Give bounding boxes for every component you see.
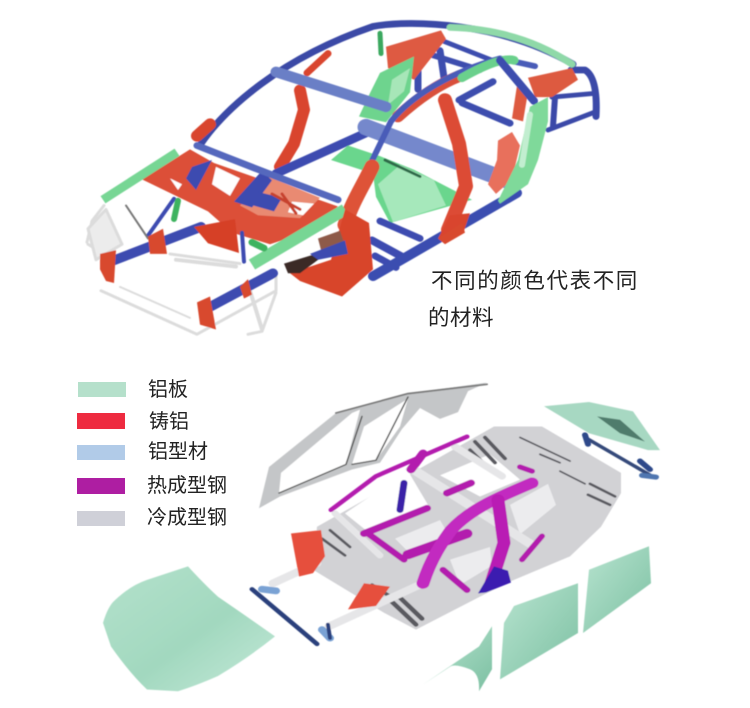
- rear frame in blue: [548, 70, 596, 130]
- front rails in blue: [108, 199, 273, 310]
- body shell in grey: [313, 426, 621, 630]
- legend item: hot-formed steel: 热成型钢: [147, 474, 227, 497]
- legend item: cold-formed steel: [77, 506, 227, 529]
- rear red parts: [488, 68, 578, 194]
- near arc in purple: [423, 483, 532, 583]
- rear cross beam in light blue: [366, 127, 507, 180]
- near B pillar in red: [445, 100, 466, 230]
- front door in green: [500, 583, 578, 679]
- lower body in red: [194, 219, 239, 253]
- firewall in red: [142, 149, 338, 244]
- crash box joints in red: [100, 223, 465, 329]
- firewall openings and blue insets: [170, 160, 320, 218]
- far B pillar lower in dark blue: [400, 483, 404, 510]
- legend item: aluminium sheet: [78, 378, 188, 401]
- wheel house dark: [284, 254, 326, 273]
- floor panels in green: [331, 146, 472, 223]
- near B pillar base in dark blue: [478, 566, 511, 593]
- front struts in green: [103, 152, 345, 265]
- near rocker in blue: [373, 193, 517, 276]
- caption: different colours represent different materials: 的材料: [428, 306, 494, 330]
- legend item: hot-formed steel: [77, 474, 227, 497]
- far roof rail in blue: [201, 23, 573, 144]
- exploded car diagram: [103, 383, 660, 691]
- car frame: coloured material diagram: [87, 23, 596, 334]
- legend item: aluminium profile: [77, 440, 208, 463]
- roof cross beam in blue: [276, 72, 386, 107]
- far rear pillars and beams in blue: [418, 39, 510, 123]
- rear window frame in green: [544, 402, 660, 477]
- hot-formed members in purple: [331, 437, 542, 590]
- near roof rail and A pillar: [398, 76, 460, 116]
- roof side panel in grey: [259, 383, 487, 508]
- cast aluminium towers in red: [291, 530, 390, 609]
- caption: different colours represent different materials: 不同的颜色代表不同: [431, 269, 639, 293]
- beams in light grey: [273, 447, 534, 626]
- rear roof strip in green: [450, 27, 572, 64]
- front fender in green: [423, 626, 492, 691]
- front ghost structure in light grey: [87, 206, 276, 334]
- rear door in green: [583, 546, 651, 633]
- engine block in brown: [318, 231, 346, 254]
- far C pillar in red and green: [386, 30, 446, 80]
- legend item: cast aluminium: [77, 410, 189, 433]
- floor rocker far side in blue: [276, 133, 366, 174]
- legend item: aluminium profile: 铝型材: [148, 440, 208, 463]
- near rear roof and C pillar in green: [462, 60, 514, 78]
- floor cross members in blue: [372, 221, 420, 267]
- legend: [77, 378, 227, 529]
- far pillars in red: [197, 54, 328, 167]
- dark shading details: [322, 437, 615, 625]
- legend item: aluminium sheet: 铝板: [148, 378, 188, 401]
- front bumper in dark blue: [252, 589, 330, 644]
- hood in aluminium green: [103, 566, 275, 691]
- windshield lower beam in blue: [197, 146, 338, 200]
- legend item: cast aluminium: 铸铝: [149, 410, 189, 433]
- body openings and floor: [345, 454, 556, 585]
- legend item: cold-formed steel: 冷成型钢: [147, 506, 227, 529]
- near B pillar in purple: [491, 500, 504, 583]
